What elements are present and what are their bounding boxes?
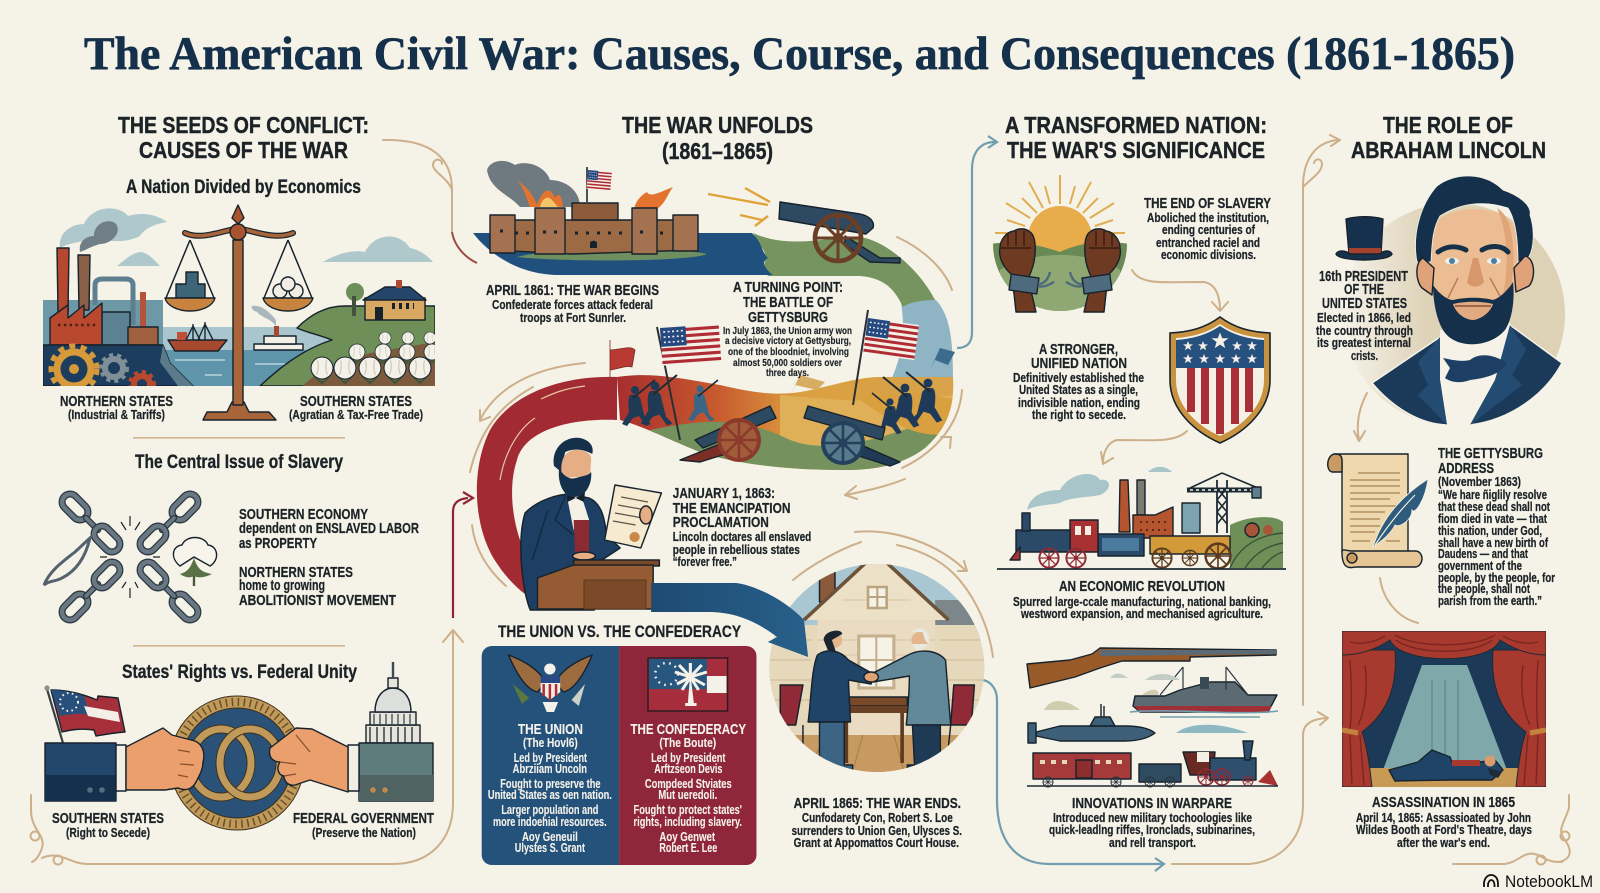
text: 16th president (1316, 269, 1413, 363)
ribbon: green land and cannon ground (753, 233, 935, 307)
text: Emancipation: THE EMANCIPATION (673, 501, 791, 517)
icon: union eagle (509, 655, 592, 712)
text: stronger nation: United States as a single, (1019, 383, 1138, 397)
comparison heading: THE UNION VS. THE CONFEDERACY (498, 623, 741, 641)
text: assassination (1356, 795, 1532, 850)
union column text: Larger population and (501, 803, 598, 817)
Lincoln heading: THE ROLE OF (1383, 112, 1513, 138)
text: Gettysburg Address: people, by the people, for (1438, 571, 1555, 585)
confederacy column text: THE CONFEDERACY (630, 722, 746, 738)
text: Gettysburg: one of the bloodniet, involving (728, 346, 849, 358)
slavery text: as PROPERTY (239, 536, 317, 552)
subheading: economics: A Nation Divided by Economics (126, 177, 361, 198)
icon: balance scale (165, 205, 313, 420)
text: Emancipation: PROCLAMATION (673, 515, 769, 531)
text: Gettysburg Address: government of the (1438, 559, 1522, 573)
war heading (622, 112, 813, 164)
text: economic revolution (1013, 579, 1271, 621)
text: 16th president: OF THE (1344, 282, 1384, 298)
labels: southern states and federal government (52, 811, 434, 840)
text: 16th president: UNITED STATES (1322, 296, 1407, 312)
text: Emancipation: JANUARY 1, 1863: (673, 486, 775, 502)
icon: Ford's Theatre stage (1342, 631, 1546, 787)
ribbon: battlefield with flags, soldiers and cannons (610, 310, 960, 480)
ribbon: blue arrow to surrender (651, 583, 808, 657)
icon: confederate flag with palm (648, 658, 728, 711)
text: assassination: Wildes Booth at Ford's Theatre, days (1356, 823, 1532, 837)
icon: locomotive, factory and farm (997, 467, 1286, 569)
confederacy column text: Aoy Genwet (659, 830, 716, 844)
confederacy column text: rights, including slavery. (634, 815, 742, 829)
text: April 1861: APRIL 1861: THE WAR BEGINS (486, 283, 659, 299)
text: April 1861: Confederate forces attack federal (492, 298, 653, 312)
text: innovations: Introduced new military tochoologies like (1053, 811, 1252, 825)
union column text: Abrziiam Uncoln (513, 762, 587, 776)
text: innovations: and rell transport. (1109, 836, 1196, 850)
union column text: Led by President (514, 751, 588, 765)
text: stronger nation (1013, 342, 1144, 422)
text: 16th president: its greatest internal (1317, 336, 1411, 350)
text: April 1861: troops at Fort Sunrler. (520, 311, 626, 325)
panel: significance (990, 112, 1286, 850)
text: Emancipation: Lincoln doctares all enslaved (673, 530, 811, 544)
text: April 1865 (792, 796, 962, 850)
text: economic revolution: AN ECONOMIC REVOLUTION (1059, 579, 1225, 595)
text: Gettysburg Address: Daudens — and that (1438, 547, 1529, 561)
text: Gettysburg Address: the people, shall not (1438, 582, 1531, 596)
text: Gettysburg Address: fiom died in vate — that (1438, 512, 1548, 526)
panel: union vs confederacy (482, 646, 756, 865)
slavery text (239, 507, 419, 609)
union column text: Aoy Geneuil (522, 830, 578, 844)
text: Gettysburg Address: parish from the earth.” (1438, 594, 1542, 608)
union column text: THE UNION (518, 722, 583, 738)
text: Gettysburg: GETTYSBURG (748, 310, 828, 326)
text: stronger nation: Definitively established the (1013, 371, 1144, 385)
icon: Lincoln at podium with proclamation (521, 438, 661, 610)
union column text: Ulystes S. Grant (515, 841, 586, 855)
confederacy column text: Robert E. Lee (659, 841, 717, 855)
text: 16th president: Elected in 1866, led (1317, 311, 1411, 325)
text: 16th president: crists. (1351, 349, 1378, 363)
timeline ribbon: blue sky on right (892, 277, 953, 378)
confederacy column text: Led by President (651, 751, 726, 765)
confederacy column text: Fought to protect states' (634, 803, 742, 817)
text: Gettysburg: three days. (766, 367, 809, 379)
text: Gettysburg: In July 1863, the Union army won (723, 325, 852, 337)
portrait: Abraham Lincoln (1343, 176, 1565, 425)
text: Emancipation: people in rebellious states (673, 543, 800, 557)
union column text: United States as oen nation. (488, 788, 612, 802)
text: Gettysburg: THE BATTLE OF (743, 295, 833, 311)
confederacy column text: Mut ueredoli. (658, 788, 717, 802)
text: economic revolution: Spurred large-ccale manufacturing, national banking, (1013, 595, 1271, 609)
union column text: Fought to preserve the (500, 777, 600, 791)
slavery text: dependent on ENSLAVED LABOR (239, 521, 419, 537)
labels: northern and southern states: (Agratian & Tax-Free Trade) (289, 408, 423, 422)
text: Gettysburg Address: “We hare ñiglily resolve (1438, 488, 1547, 502)
icon: tug of war hands on rope rings (45, 702, 433, 824)
icon: capitol dome (366, 662, 420, 743)
panel: the war unfolds (473, 112, 992, 865)
text: Gettysburg Address: this nation, under God, (1438, 524, 1542, 538)
text: stronger nation: the right to secede. (1032, 408, 1126, 422)
panel: role of Lincoln (1316, 112, 1565, 850)
labels: northern and southern states: (Industrial & Tariffs) (68, 408, 165, 422)
icon: rifle, ironclad, submarine and train (1027, 648, 1278, 787)
logo: NotebookLM: NotebookLM (1505, 873, 1593, 891)
subheading: slavery: The Central Issue of Slavery (135, 452, 343, 473)
war heading: THE WAR UNFOLDS (622, 112, 813, 138)
Lincoln heading (1351, 112, 1546, 163)
text: 16th president: 16th PRESIDENT (1319, 269, 1408, 285)
text: end of slavery: economic divisions. (1161, 248, 1256, 262)
labels: southern states and federal government: SOUTHERN STATES (52, 811, 164, 827)
icon: scroll and quill (1328, 454, 1428, 568)
text: stronger nation: indivisible nation, ending (1018, 396, 1140, 410)
text: innovations: INNOVATIONS IN WARPARE (1072, 796, 1232, 812)
text: stronger nation: UNIFIED NATION (1031, 356, 1127, 372)
causes heading: CAUSES OF THE WAR (139, 137, 348, 163)
text: Gettysburg Address: THE GETTYSBURG (1438, 446, 1543, 462)
title: The American Civil War: Causes, Course, and Consequences (1861-1865) (84, 28, 1515, 80)
text: innovations: quick-leadlng riffes, Ironclads, subinarines, (1049, 823, 1255, 837)
text: Gettysburg Address: (November 1863) (1438, 475, 1521, 489)
text: April 1865: surrenders to Union Gen, Ulysces S. (792, 824, 962, 838)
slavery text: SOUTHERN ECONOMY (239, 507, 368, 523)
confederacy column text: Compdeed Stviates (645, 777, 732, 791)
icon: sunrise and broken shackles (990, 175, 1130, 320)
labels: northern and southern states (60, 394, 423, 422)
text: assassination: April 14, 1865: Assassioated by John (1356, 811, 1531, 825)
text: Emancipation: “forever free.” (673, 555, 737, 569)
text: Gettysburg: A TURNING POINT: (733, 280, 843, 296)
icon: surrender at Appomattox house (769, 564, 984, 772)
text: assassination: ASSASSINATION IN 1865 (1372, 795, 1515, 811)
icon: broken chains and cotton (44, 491, 217, 623)
labels: northern and southern states: NORTHERN STATES (60, 394, 173, 410)
causes heading (118, 112, 369, 163)
connector flourishes and arrows (30, 135, 1570, 871)
text: 16th president: the country through (1316, 324, 1413, 338)
text: end of slavery: entranched raciel and (1156, 236, 1260, 250)
economics illustration: factories, water, farm (43, 208, 440, 396)
icon: top hat (1336, 217, 1392, 260)
confederacy column text (630, 722, 746, 855)
text: Gettysburg Address: ADDRESS (1438, 461, 1494, 477)
text: Gettysburg: a decisive victory at Gettysburg, (725, 335, 851, 347)
causes heading: THE SEEDS OF CONFLICT: (118, 112, 369, 138)
text: April 1865: Cunfodarety Con, Robert S. Loe (802, 811, 953, 825)
labels: northern and southern states: SOUTHERN STATES (300, 394, 412, 410)
slavery text: NORTHERN STATES (239, 565, 353, 581)
text: Gettysburg Address: that these dead shall not (1438, 500, 1551, 514)
Lincoln heading: ABRAHAM LINCOLN (1351, 137, 1546, 163)
war heading: (1861–1865) (662, 138, 773, 164)
text: end of slavery: ending centuries of (1162, 223, 1256, 237)
text: end of slavery (1144, 196, 1271, 262)
text: April 1865: APRIL 1865: THE WAR ENDS. (794, 796, 961, 812)
labels: southern states and federal government: (Preserve the Nation) (312, 826, 416, 840)
significance heading: A TRANSFORMED NATION: (1005, 112, 1267, 138)
text: innovations (1049, 796, 1255, 850)
icon: Fort Sumter with flames (473, 161, 773, 275)
confederacy column text: Arftzseon Devis (654, 762, 722, 776)
panel: causes of the war (43, 112, 440, 840)
subheading: states' rights: States' Rights vs. Federal Unity (122, 662, 357, 683)
union column text: (The Hovl6) (523, 736, 578, 750)
text: Gettysburg Address (1438, 446, 1555, 608)
text: April 1865: Grant at Appomattos Court House. (794, 836, 959, 850)
union column text: more indoehial resources. (493, 815, 607, 829)
icon: Confederate flag (44, 685, 125, 743)
text: assassination: after the war's end. (1397, 836, 1490, 850)
text: end of slavery: THE END OF SLAVERY (1144, 196, 1271, 212)
text: end of slavery: Aboliched the institution, (1147, 211, 1269, 225)
slavery text: home to growing (239, 578, 325, 594)
text: Gettysburg: almost 50,000 soldiers over (733, 357, 842, 369)
ribbon: red arc (477, 377, 617, 609)
text: Emancipation (673, 486, 811, 569)
slavery text: ABOLITIONIST MOVEMENT (239, 593, 396, 609)
icon: union shield (1170, 317, 1270, 443)
text: Gettysburg Address: shall have a new birth of (1438, 536, 1549, 550)
labels: southern states and federal government: (Right to Secede) (66, 826, 150, 840)
icon: firing cannon (708, 188, 900, 263)
text: Gettysburg (723, 280, 852, 379)
significance heading (1005, 112, 1267, 163)
confederacy column text: (The Boute) (659, 736, 716, 750)
text: stronger nation: A STRONGER, (1039, 342, 1118, 358)
labels: southern states and federal government: FEDERAL GOVERNMENT (293, 811, 434, 827)
union column text (488, 722, 612, 855)
text: economic revolution: westword expansion, and mechanised agriculture. (1020, 607, 1263, 621)
text: April 1861 (486, 283, 659, 325)
significance heading: THE WAR'S SIGNIFICANCE (1007, 137, 1265, 163)
